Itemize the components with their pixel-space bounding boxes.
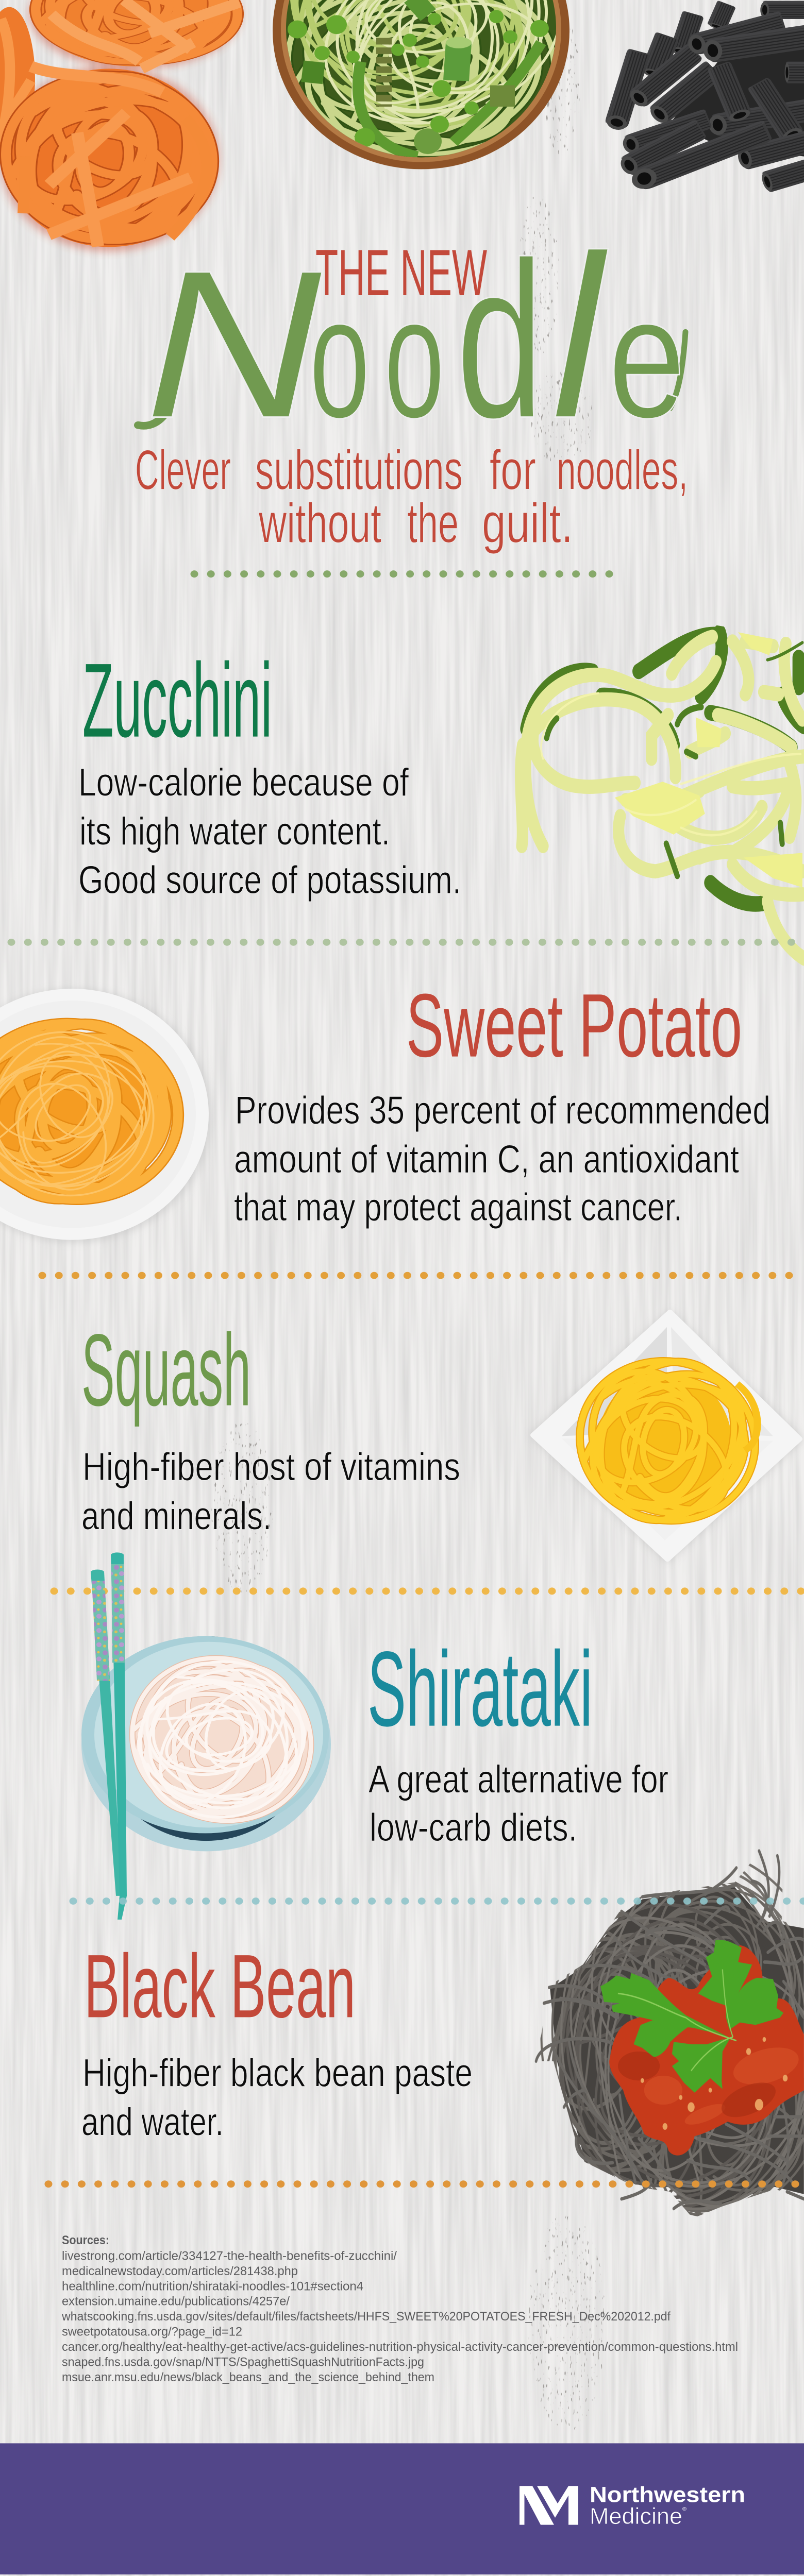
body: black bean: and water. <box>81 2099 224 2144</box>
body: zucchini <box>78 760 461 902</box>
body: zucchini: Good source of potassium. <box>78 858 461 902</box>
parsley <box>600 1940 783 2093</box>
body: squash <box>81 1445 460 1538</box>
divider: black bean <box>48 2180 804 2188</box>
divider: squash <box>54 1587 804 1595</box>
heading: noodle: l <box>551 207 610 466</box>
title <box>135 207 688 554</box>
heading: noodle: d <box>456 215 544 464</box>
sources: livestrong.com/article/334127-the-health-benefits-of-zucchini/ <box>62 2249 397 2263</box>
heading: noodle: e <box>608 261 685 454</box>
body: squash: High-fiber host of vitamins <box>82 1445 460 1488</box>
image: squash noodles on square plate <box>531 1311 803 1562</box>
panel: squash <box>81 1311 803 1562</box>
subtitle: Clever <box>135 439 231 501</box>
footer band <box>0 2443 804 2574</box>
heading: the new: THE NEW <box>315 236 487 310</box>
heading: noodle <box>138 207 685 466</box>
body: zucchini: Low-calorie because of <box>78 760 409 804</box>
logo: Northwestern Medicine <box>520 2483 745 2529</box>
body: shirataki: low-carb diets. <box>370 1805 577 1849</box>
sources: sweetpotatousa.org/?page_id=12 <box>62 2325 242 2338</box>
sources <box>61 2233 738 2384</box>
body: black bean <box>81 2051 473 2144</box>
subtitle: the <box>407 492 459 554</box>
panel: sweet potato <box>0 975 770 1249</box>
logo: Northwestern Medicine: Medicine <box>590 2503 682 2529</box>
image: carrot noodle nests <box>0 0 259 259</box>
logo: Northwestern Medicine: Northwestern <box>590 2483 745 2507</box>
heading: noodle: N <box>144 226 325 462</box>
panel: shirataki <box>81 1552 668 1920</box>
heading: noodle: o <box>309 261 370 454</box>
sources: Sources: <box>62 2233 109 2247</box>
body: squash: and minerals. <box>81 1494 272 1538</box>
sources: extension.umaine.edu/publications/4257e/ <box>62 2295 290 2308</box>
subtitle: noodles, <box>557 439 688 501</box>
sources: whatscooking.fns.usda.gov/sites/default/files/factsheets/HHFS_SWEET%20POTATOES_FRESH_Dec%202012.pdf <box>61 2310 671 2324</box>
panel: black bean <box>82 1849 804 2216</box>
sources: snaped.fns.usda.gov/snap/NTTS/SpaghettiSquashNutritionFacts.jpg <box>62 2355 424 2369</box>
subtitle: substitutions <box>255 439 463 501</box>
body: black bean: High-fiber black bean paste <box>82 2051 473 2095</box>
divider: shirataki <box>73 1897 804 1905</box>
sources: medicalnewstoday.com/articles/281438.php <box>62 2264 298 2278</box>
divider: title <box>194 570 613 578</box>
image: zucchini spirals <box>521 632 804 959</box>
subtitle <box>135 439 688 554</box>
sources: msue.anr.msu.edu/news/black_beans_and_the_science_behind_them <box>62 2370 434 2384</box>
subtitle: without <box>258 492 381 554</box>
body: zucchini: its high water content. <box>79 809 390 853</box>
icon: NM mark <box>520 2486 578 2525</box>
sources: cancer.org/healthy/eat-healthy-get-active/acs-guidelines-nutrition-physical-activity-cancer-prevention/common-questions.html <box>62 2340 738 2354</box>
panel: zucchini: Zucchini <box>82 642 272 759</box>
image: chopsticks <box>91 1552 127 1920</box>
heading: noodle: o <box>384 261 445 454</box>
divider: sweet potato <box>42 1272 804 1279</box>
logo: Northwestern Medicine: ® <box>682 2506 686 2512</box>
sources: healthline.com/nutrition/shirataki-noodles-101#section4 <box>62 2279 363 2293</box>
body: shirataki: A great alternative for <box>368 1757 668 1801</box>
divider: zucchini <box>11 938 804 946</box>
panel: zucchini <box>78 632 804 959</box>
body: shirataki <box>368 1757 668 1849</box>
image: sweet potato noodles on plate <box>0 979 213 1249</box>
image: black bean noodles with sauce <box>535 1849 804 2216</box>
image: black rigatoni <box>604 1 804 194</box>
image: shirataki bowl <box>81 1612 362 1867</box>
subtitle: guilt. <box>482 492 573 554</box>
panel: squash: Squash <box>81 1313 251 1427</box>
image: zucchini noodle bowl <box>209 0 629 198</box>
subtitle: for <box>490 439 536 501</box>
heading: black bean: Black Bean <box>84 1936 356 2037</box>
body: sweet potato <box>234 1088 770 1229</box>
